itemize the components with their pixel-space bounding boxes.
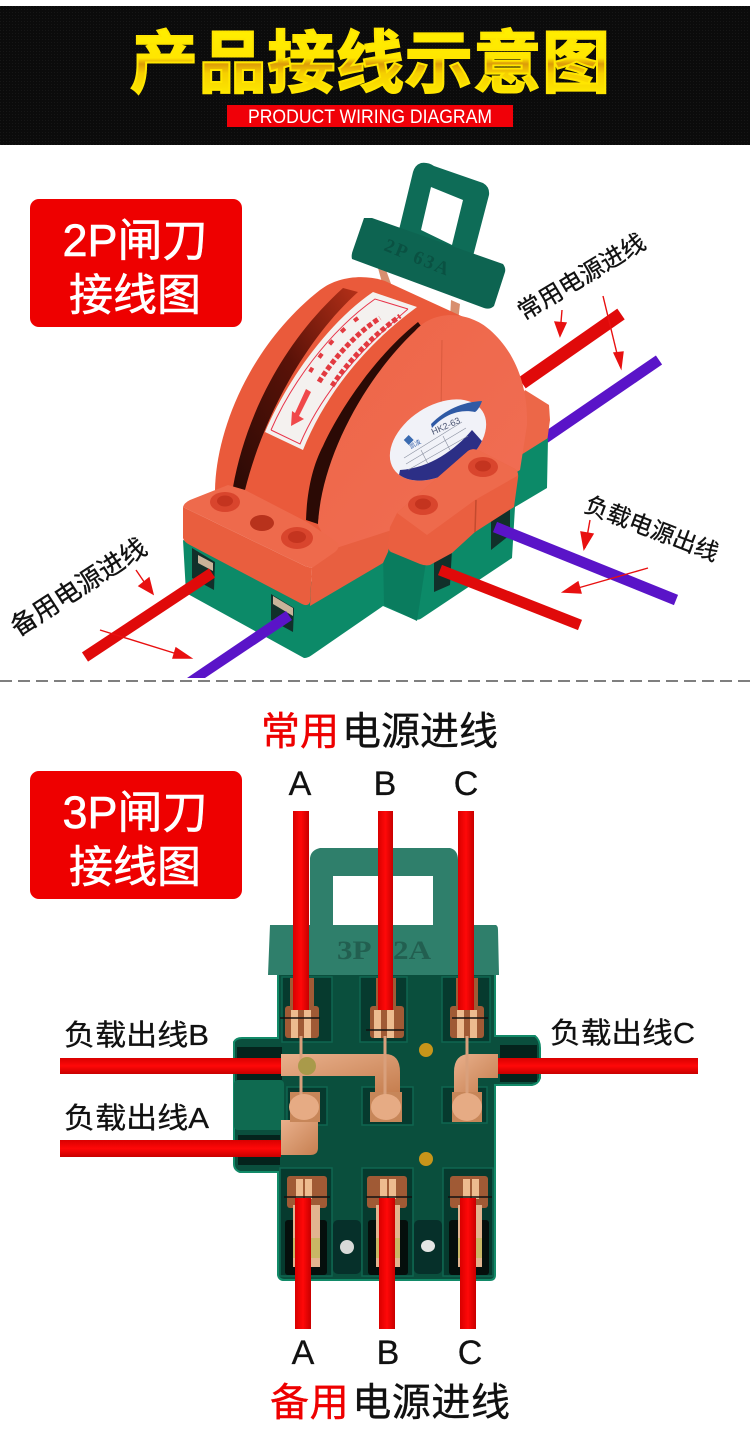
phase letters top: A — [289, 765, 312, 803]
strip arrow — [291, 389, 311, 426]
bottom supply wires — [295, 1198, 476, 1329]
screw holes — [210, 492, 313, 549]
handle — [310, 848, 458, 926]
badge: 2P wiring: 2P闸刀 — [62, 215, 208, 266]
top supply wires — [293, 811, 474, 1010]
badge: 3P wiring: 3P闸刀 — [62, 787, 208, 838]
title: 产品接线示意图 — [130, 26, 610, 102]
back block — [505, 390, 550, 468]
label: 常用电源进线: 常用电源进线 — [513, 229, 651, 326]
handle: 2P 63A — [381, 235, 452, 280]
phase letters top — [289, 765, 478, 803]
mounting holes — [333, 1220, 442, 1274]
wire: top purple — [545, 360, 659, 438]
right terminal block — [388, 449, 518, 565]
phase letters top: C — [454, 765, 478, 803]
label: 备用电源进线: 备用电源进线 — [5, 532, 152, 642]
load wires — [60, 1058, 698, 1157]
subtitle bar: PRODUCT WIRING DIAGRAM — [248, 107, 492, 128]
arrows: 2P annotations — [100, 296, 648, 658]
blade stems — [301, 1036, 467, 1100]
wire: top red — [522, 314, 621, 383]
badge: 3P wiring: 接线图 — [69, 843, 201, 892]
right dome face — [318, 315, 527, 558]
copper clip bases — [290, 1092, 482, 1122]
wire: left purple — [187, 611, 292, 678]
wire: right purple — [495, 527, 676, 600]
phase letters bottom: A — [292, 1334, 315, 1372]
top contacts — [280, 978, 488, 1038]
copper busbars — [281, 1054, 498, 1155]
phase letters bottom: C — [458, 1334, 482, 1372]
label strip — [265, 292, 417, 450]
badge: 3P wiring — [30, 771, 242, 899]
heading: 常用电源进线: 常用电源进线 — [261, 711, 498, 754]
lower contacts — [284, 1176, 492, 1275]
rivet — [298, 1057, 316, 1075]
dome body — [215, 277, 527, 558]
socket contacts — [198, 555, 293, 616]
copper clips — [289, 1093, 482, 1121]
label: load B: 负载出线B — [64, 1019, 209, 1052]
badge: 2P wiring — [30, 199, 242, 327]
body — [234, 974, 540, 1280]
brass studs — [419, 1043, 433, 1057]
bar — [268, 925, 499, 975]
side block — [234, 1080, 284, 1130]
badge: 2P wiring: 接线图 — [69, 271, 201, 320]
green base — [183, 438, 548, 658]
slot right — [306, 322, 424, 524]
slot left — [233, 288, 358, 490]
socket slots — [192, 508, 510, 632]
pockets — [280, 977, 493, 1276]
strip print — [310, 316, 400, 386]
screw holes — [408, 457, 498, 515]
label: load C: 负载出线C — [550, 1017, 695, 1050]
2P knife switch photo — [85, 163, 676, 678]
lug slots — [237, 1045, 537, 1165]
label: load A: 负载出线A — [64, 1102, 210, 1135]
heading: 备用电源进线: 备用电源进线 — [270, 1382, 510, 1425]
label: 负载电源出线: 负载电源出线 — [581, 491, 722, 566]
handle — [352, 163, 505, 322]
wire: right red — [440, 570, 580, 625]
spec label — [390, 399, 486, 481]
3P knife switch photo — [234, 848, 540, 1280]
wire: left red — [85, 573, 212, 657]
phase letters bottom — [292, 1334, 482, 1372]
spec label: 凯凌 — [408, 438, 422, 451]
bar: 3P 62A — [337, 936, 431, 965]
spec label: HK2-63 — [430, 415, 462, 437]
phase letters top: B — [374, 765, 396, 803]
left terminal block — [183, 485, 392, 606]
phase letters bottom: B — [377, 1334, 399, 1372]
header banner — [0, 6, 750, 145]
base shading — [383, 550, 426, 621]
